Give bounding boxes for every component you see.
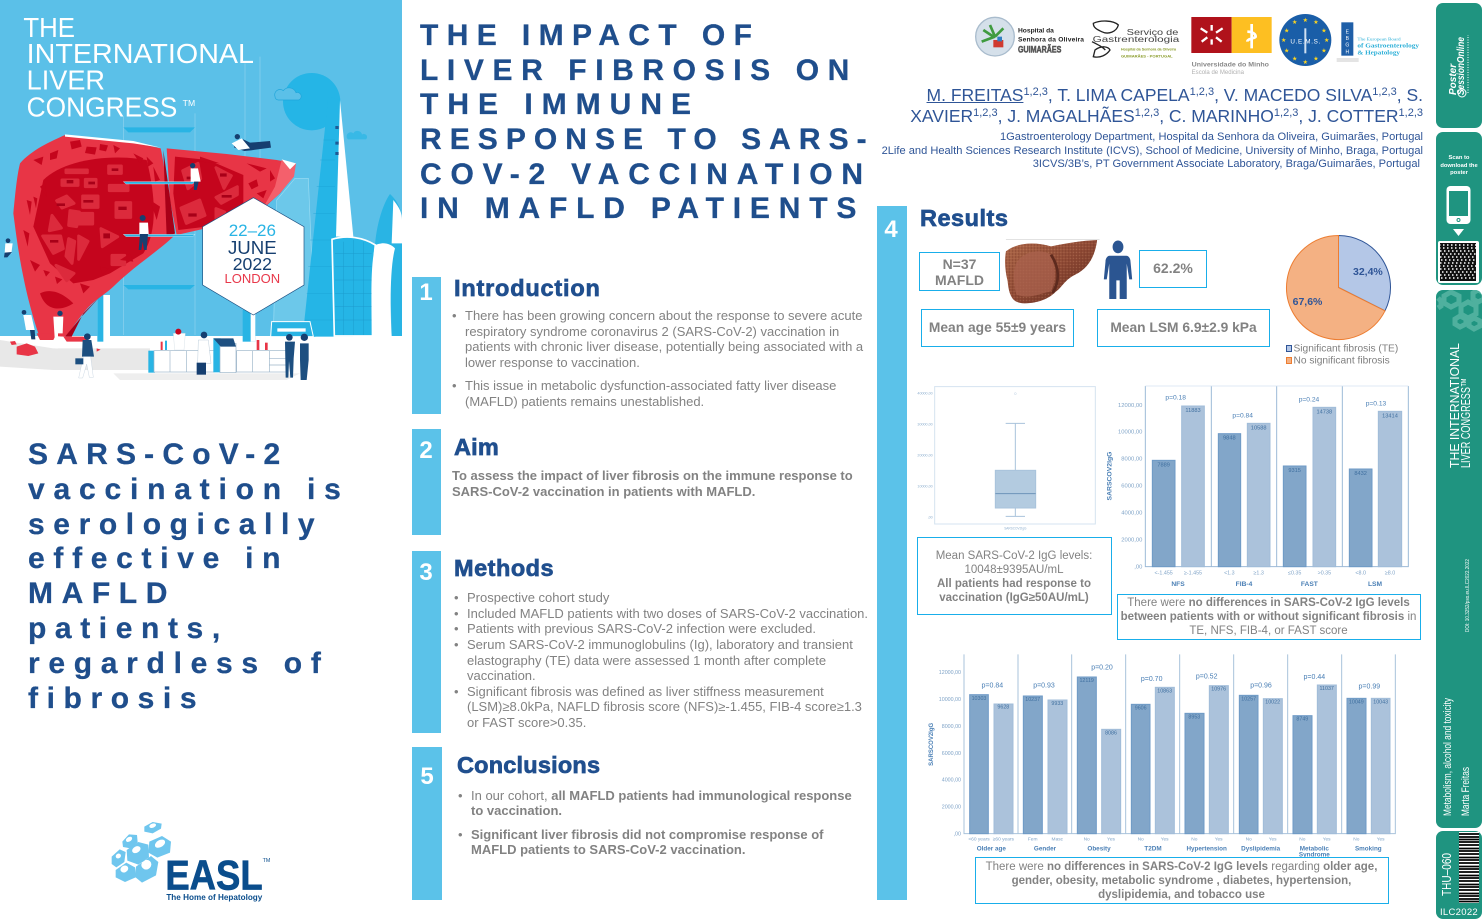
- bar chart: IgG by clinical factor: 8953: [1188, 714, 1200, 720]
- bar chart: IgG by fibrosis score: 13414: [1382, 414, 1398, 420]
- stat box: N=37 MAFLD: N=37: [943, 256, 976, 272]
- callout: mean IgG levels: 10048±9395AU/mL: [964, 564, 1064, 576]
- methods bullets: or FAST score>0.35.: [467, 715, 586, 730]
- logo: european board of gastroenterology and hepatology: H: [1346, 49, 1350, 55]
- bar chart: IgG by fibrosis score: p=0.84: [1232, 413, 1253, 420]
- methods bullets: •: [454, 606, 459, 621]
- affiliations: 2Life and Health Sciences Research Institute (ICVS), School of Medicine, University of Minho, Braga, Portugal: [882, 145, 1423, 157]
- icon: hexagon motif: [1436, 290, 1482, 332]
- aim text: To assess the impact of liver fibrosis on the immune response to: [452, 468, 853, 483]
- side strip: poster session online: Poster: [1448, 63, 1459, 95]
- bar chart: IgG by clinical factor: SARSCOV2IgG: [929, 723, 935, 766]
- scientists: [4, 134, 309, 380]
- affiliations: 3ICVS/3B’s, PT Government Associate Laboratory, Braga/Guimarães, Portugal: [1033, 158, 1420, 170]
- pie chart: significant fibrosis: [1286, 235, 1398, 366]
- hexagon date badge: [203, 198, 304, 315]
- bar chart: IgG by clinical factor: ,00: [954, 831, 961, 837]
- bar chart: IgG by clinical factor: Older age: [977, 846, 1006, 853]
- logo: uems: ★: [1313, 19, 1319, 26]
- introduction bullets: lower response to vaccination.: [465, 355, 640, 370]
- box plot: SARS-CoV-2 IgG: 10000,00: [917, 484, 933, 488]
- pie legend: Significant fibrosis (TE): [1293, 344, 1398, 354]
- bar chart: IgG by clinical factor: 8000,00: [942, 724, 961, 730]
- pie legend: [1286, 344, 1398, 366]
- bar chart: IgG by clinical factor: No: [1246, 837, 1252, 843]
- heading: introduction: Introduction: [454, 275, 601, 301]
- logo: universidade do minho: Universidade do Minho: [1192, 61, 1269, 68]
- bar chart: IgG by clinical factor: 12119: [1079, 678, 1094, 684]
- box plot: SARS-CoV-2 IgG: [917, 386, 1096, 531]
- left takeaway message: SARS-CoV-2: [28, 438, 288, 471]
- methods bullets: •: [454, 621, 459, 636]
- bar chart: IgG by clinical factor: 11037: [1319, 686, 1334, 692]
- number tab 3: [412, 551, 441, 733]
- bar chart: IgG by clinical factor: 2000,00: [942, 804, 961, 810]
- authors: XAVIER1,2,3, J. MAGALHÃES1,2,3, C. MARINHO1,2,3, J. COTTER1,2,3: [910, 106, 1423, 126]
- heading: methods: Methods: [454, 555, 554, 581]
- bar chart: IgG by clinical factor: p=0.99: [1359, 684, 1380, 691]
- methods bullets: Significant fibrosis was defined as liver stiffness measurement: [467, 684, 824, 699]
- icon: liver image: [1005, 239, 1100, 304]
- methods bullets: Prospective cohort study: [467, 590, 609, 605]
- logo: uems: ★: [1284, 48, 1289, 55]
- bar chart: IgG by fibrosis score: 9315: [1288, 468, 1301, 474]
- authors: [910, 85, 1423, 126]
- methods bullets: Included MAFLD patients with two doses of SARS-CoV-2 vaccination.: [467, 606, 868, 621]
- bar chart: IgG by clinical factor: T2DM: [1144, 846, 1162, 853]
- conclusions bullets: to vaccination.: [471, 803, 562, 818]
- logo: uems: ★: [1321, 27, 1327, 34]
- bar chart: IgG by fibrosis score: <-1.455: [1155, 571, 1173, 577]
- bar chart: IgG by clinical factor: 8749: [1296, 717, 1308, 723]
- bar chart: IgG by clinical factor: No: [1353, 837, 1360, 843]
- bar chart: IgG by clinical factor: p=0.44: [1304, 674, 1325, 681]
- bar chart: IgG by clinical factor: Gender: [1034, 846, 1057, 853]
- introduction bullets: patients with chronic liver disease, potentially being associated with a: [465, 339, 863, 354]
- callout: no differences by fibrosis: There were no differences in SARS-CoV-2 IgG levels: [1127, 597, 1410, 609]
- EASL logo: The Home of Hepatology: [166, 892, 262, 902]
- bar chart: IgG by clinical factor: Obesity: [1087, 846, 1111, 853]
- hexagon date badge: 22–26: [229, 221, 276, 240]
- bar chart: IgG by fibrosis score: 11883: [1185, 408, 1201, 414]
- logo: european board of gastroenterology and hepatology: B: [1346, 36, 1350, 42]
- affiliations: 1Gastroenterology Department, Hospital da Senhora da Oliveira, Guimarães, Portugal: [1000, 131, 1423, 143]
- bar chart: IgG by fibrosis score: FAST: [1301, 581, 1318, 588]
- bar chart: IgG by clinical factor: Yes: [1269, 837, 1277, 843]
- scan caption: download the: [1440, 162, 1478, 168]
- number tab 3: 3: [419, 559, 433, 586]
- congress wordmark: THE: [23, 12, 75, 43]
- introduction bullets: respiratory syndrome coronavirus 2 (SARS-CoV-2) vaccination in: [465, 324, 839, 339]
- poster title: [420, 19, 875, 225]
- EASL logo: TM: [263, 858, 270, 864]
- bar chart: IgG by fibrosis score: ≥-1.455: [1184, 571, 1202, 577]
- poster title: IN MAFLD PATIENTS: [420, 192, 865, 225]
- bar chart: IgG by clinical factor: Yes: [1323, 837, 1331, 843]
- bar chart: IgG by clinical factor: 10863: [1157, 688, 1172, 694]
- bar chart: IgG by clinical factor: <60 years: [968, 837, 990, 843]
- aim text: [452, 468, 853, 499]
- doi: DOI: 10.3252/pso.eu.ILC2022.2022: [1465, 559, 1471, 632]
- methods bullets: elastography (TE) data were assessed 1 month after complete: [467, 653, 826, 668]
- congress name: THE INTERNATIONAL: [1447, 343, 1462, 468]
- left takeaway message: fibrosis: [28, 682, 205, 715]
- logo: uems: ★: [1324, 37, 1329, 44]
- conclusions bullets: •: [458, 827, 463, 842]
- bar chart: IgG by clinical factor: p=0.52: [1196, 673, 1218, 680]
- bar chart: IgG by clinical factor: 10976: [1211, 687, 1226, 693]
- bar chart: IgG by clinical factor: 9628: [997, 705, 1009, 711]
- box plot: SARS-CoV-2 IgG: 20000,00: [917, 454, 933, 458]
- logo: european board of gastroenterology and hepatology: [1337, 22, 1420, 62]
- bar chart: IgG by clinical factor: Fem: [1028, 837, 1038, 843]
- left takeaway message: serologically: [28, 508, 323, 541]
- bar chart: IgG by clinical factor: 12000,00: [939, 670, 961, 676]
- bar chart: IgG by fibrosis score: 4000,00: [1121, 511, 1143, 517]
- section 4: results tab: [877, 206, 907, 900]
- bar chart: IgG by clinical factor: Dyslipidemia: [1241, 846, 1281, 853]
- hexagon date badge: LONDON: [225, 271, 280, 286]
- EASL logo: EASL: [165, 852, 263, 898]
- left takeaway message: vaccination is: [28, 473, 350, 506]
- bar chart: IgG by clinical factor: 10237: [1025, 697, 1040, 703]
- liver shape: [10, 134, 296, 356]
- bar chart: IgG by fibrosis score: <8.0: [1355, 571, 1366, 577]
- box plot: SARS-CoV-2 IgG: 30000,00: [917, 423, 933, 427]
- congress wordmark: TM: [183, 98, 195, 108]
- bar chart: IgG by clinical factor: 9933: [1051, 701, 1063, 707]
- bar chart: IgG by clinical factor: 10000,00: [939, 697, 961, 703]
- stat box: mean age: [921, 309, 1074, 347]
- logo: hospital da senhora da oliveira: GUIMARÃES: [1018, 45, 1061, 55]
- bar chart: IgG by fibrosis score: >0.35: [1318, 571, 1331, 577]
- side strip: poster number and barcode: [1436, 831, 1482, 919]
- poster title: COV-2 VACCINATION: [420, 158, 872, 191]
- bar chart: IgG by clinical factor: 8086: [1105, 730, 1117, 736]
- callout: no differences by fibrosis: between patients with or without significant fibrosis in: [1121, 611, 1416, 623]
- congress name: LIVER CONGRESS™: [1458, 378, 1473, 468]
- logo: uems: ★: [1292, 56, 1297, 63]
- hexagon date badge: 2022: [233, 254, 272, 274]
- bar chart: IgG by clinical factor: p=0.20: [1091, 665, 1113, 672]
- callout: no differences by fibrosis: [1117, 594, 1421, 640]
- bar chart: IgG by clinical factor: Smoking: [1355, 846, 1382, 853]
- bar chart: IgG by fibrosis score: 6000,00: [1121, 484, 1143, 490]
- logo: universidade do minho: Escola de Medicina: [1192, 70, 1245, 76]
- bar chart: IgG by clinical factor: 4000,00: [942, 778, 961, 784]
- logo: uems: ★: [1321, 48, 1327, 55]
- logo: hospital da senhora da oliveira: [976, 17, 1084, 56]
- logo: servico de gastrenterologia: Gastrenterologia: [1093, 35, 1180, 44]
- bar chart: IgG by clinical factor: No: [1191, 837, 1198, 843]
- callout: no differences by clinical factor: There were no differences in SARS-CoV-2 IgG levels regarding older age,: [986, 861, 1377, 873]
- introduction bullets: (MAFLD) patients remains unestablished.: [465, 394, 704, 409]
- icon: phone and QR code: [1438, 186, 1479, 283]
- bar chart: IgG by clinical factor: Yes: [1107, 837, 1116, 843]
- bar chart: IgG by clinical factor: Metabolic: [1300, 846, 1329, 853]
- bar chart: IgG by clinical factor: 6000,00: [942, 751, 961, 757]
- number tab 5: 5: [420, 763, 434, 790]
- bar chart: IgG by fibrosis score: p=0.18: [1165, 395, 1186, 402]
- section 2: aim: [412, 429, 853, 535]
- bar chart: IgG by fibrosis score: FIB-4: [1236, 581, 1253, 588]
- topic and author: Metabolism, alcohol and toxicity: [1442, 698, 1454, 816]
- number tab 1: [412, 277, 441, 414]
- section 1: introduction: [412, 275, 864, 414]
- congress name: Marta Freitas: [1460, 767, 1472, 816]
- number tab 2: [412, 429, 441, 535]
- bar chart: IgG by clinical factor: 10043: [1373, 699, 1388, 705]
- logo: uems: ★: [1303, 17, 1308, 24]
- callout: no differences by clinical factor: [975, 857, 1389, 904]
- side strip: poster number and barcode: THU–060: [1439, 853, 1454, 896]
- heading: results: Results: [920, 205, 1008, 231]
- bar chart: IgG by clinical factor: Yes: [1161, 837, 1169, 843]
- bar chart: IgG by clinical factor: No: [1084, 837, 1090, 843]
- callout: mean IgG levels: All patients had response to: [937, 578, 1091, 590]
- callout: mean IgG levels: [917, 537, 1112, 615]
- conclusions bullets: MAFLD patients to SARS-CoV-2 vaccination.: [471, 842, 745, 857]
- logo: uems: ★: [1281, 37, 1286, 44]
- section 4: results tab: 4: [884, 216, 898, 243]
- EASL logo: [112, 822, 270, 902]
- bar chart: IgG by fibrosis score: LSM: [1368, 581, 1382, 588]
- box plot: SARS-CoV-2 IgG: 40000,00: [917, 392, 933, 396]
- logo: uems: U.E.M.S.: [1290, 38, 1321, 45]
- conclusions bullets: [458, 788, 852, 857]
- scan caption: poster: [1450, 170, 1468, 176]
- bar chart: IgG by fibrosis score: 14738: [1316, 410, 1332, 416]
- section 3: methods: [412, 551, 868, 733]
- methods bullets: •: [454, 637, 459, 652]
- bar chart: IgG by clinical factor: 10049: [1349, 699, 1364, 705]
- pie chart: significant fibrosis: 67,6%: [1292, 296, 1323, 308]
- bar chart: IgG by clinical factor: 10303: [972, 696, 986, 702]
- bar chart: IgG by fibrosis score: 12000,00: [1118, 403, 1143, 409]
- bar chart: IgG by fibrosis score: 10588: [1251, 426, 1267, 432]
- bar chart: IgG by fibrosis score: <1.3: [1224, 571, 1235, 577]
- logo: uems: ★: [1313, 56, 1319, 63]
- callout: no differences by clinical factor: dyslipidemia, and tobacco use: [1098, 889, 1265, 901]
- logo: hospital da senhora da oliveira: Senhora da Oliveira: [1018, 36, 1084, 43]
- methods bullets: vaccination.: [467, 668, 536, 683]
- introduction bullets: •: [452, 378, 457, 393]
- congress wordmark: LIVER: [27, 65, 105, 96]
- bar chart: IgG by fibrosis score: 8432: [1354, 471, 1367, 477]
- aim text: SARS-CoV-2 vaccination in patients with MAFLD.: [452, 484, 755, 499]
- pie legend: No significant fibrosis: [1293, 356, 1389, 366]
- logo: uems: ★: [1284, 27, 1289, 34]
- stat box: mean LSM: [1097, 309, 1270, 347]
- bar chart: IgG by fibrosis score: 2000,00: [1121, 538, 1143, 544]
- introduction bullets: There has been growing concern about the response to severe acute: [465, 308, 862, 323]
- left takeaway message: [28, 438, 350, 715]
- bar chart: IgG by clinical factor: Hypertension: [1186, 846, 1227, 853]
- congress wordmark: CONGRESS: [27, 91, 177, 122]
- stat box: mean LSM: Mean LSM 6.9±2.9 kPa: [1110, 320, 1257, 335]
- icon: person: [1104, 240, 1132, 299]
- logo: universidade do minho: [1191, 17, 1272, 76]
- poster title: RESPONSE TO SARS-: [420, 123, 875, 156]
- logo: european board of gastroenterology and hepatology: of Gastroenterology: [1357, 42, 1420, 49]
- bar chart: IgG by fibrosis score: 7889: [1157, 462, 1170, 468]
- methods bullets: Serum SARS-CoV-2 immunoglobulins (Ig), laboratory and transient: [467, 637, 853, 652]
- section 5: conclusions: [412, 747, 852, 900]
- hexagon date badge: JUNE: [228, 237, 277, 258]
- bar chart: IgG by clinical factor: Masc: [1052, 837, 1064, 843]
- lab bench: [148, 338, 287, 373]
- bar chart: IgG by clinical factor: Syndrome: [1299, 851, 1330, 858]
- number tab 1: 1: [419, 279, 433, 306]
- stat box: mean age: Mean age 55±9 years: [929, 320, 1066, 335]
- number tab 2: 2: [419, 437, 433, 464]
- bar chart: IgG by fibrosis score: SARSCOV2IgG: [1106, 452, 1113, 500]
- conclusions bullets: •: [458, 788, 463, 803]
- box plot: SARS-CoV-2 IgG: ,00: [928, 515, 933, 519]
- callout: mean IgG levels: vaccination (IgG≥50AU/mL): [939, 592, 1089, 604]
- bar chart: IgG by fibrosis score: p=0.13: [1366, 400, 1387, 407]
- introduction bullets: •: [452, 308, 457, 323]
- logo: european board of gastroenterology and hepatology: G: [1345, 43, 1349, 49]
- left takeaway message: regardless of: [28, 647, 330, 680]
- methods bullets: (LSM)≥8.0kPa, NAFLD fibrosis score (NFS)≥-1.455, FIB-4 score≥1.3: [467, 699, 862, 714]
- heading: aim: Aim: [454, 434, 499, 460]
- stat box: N=37 MAFLD: [919, 252, 1000, 291]
- bar chart: IgG by clinical factor: Yes: [1215, 837, 1223, 843]
- logo: uems: ★: [1292, 19, 1297, 26]
- poster title: LIVER FIBROSIS ON: [420, 54, 858, 87]
- bar chart: IgG by clinical factor: No: [1299, 837, 1306, 843]
- stat box: 62.2%: 62.2%: [1153, 260, 1193, 276]
- poster title: THE IMMUNE: [420, 88, 700, 121]
- bar chart: IgG by clinical factor: 9606: [1135, 705, 1147, 711]
- logo: european board of gastroenterology and hepatology: E: [1346, 29, 1350, 35]
- logo: servico de gastrenterologia: [1092, 21, 1180, 59]
- left takeaway message: effective in: [28, 542, 289, 575]
- logo: hospital da senhora da oliveira: Hospital da: [1018, 28, 1054, 35]
- heading: conclusions: Conclusions: [457, 752, 600, 778]
- methods bullets: •: [454, 590, 459, 605]
- number tab 5: [412, 747, 442, 900]
- side strip: poster session online: SessionOnline: [1456, 37, 1467, 95]
- logo: servico de gastrenterologia: Hospital da Senhora da Oliveira: [1121, 47, 1177, 52]
- logo: european board of gastroenterology and hepatology: & Hepatology: [1357, 50, 1401, 57]
- bar chart: IgG by fibrosis score: [1106, 386, 1409, 588]
- bar chart: IgG by clinical factor: [928, 654, 1396, 858]
- callout: no differences by clinical factor: gender, obesity, metabolic syndrome , diabetes, hypertension,: [1012, 875, 1351, 887]
- side strip: poster number and barcode: ILC2022: [1440, 907, 1478, 918]
- affiliations: [882, 131, 1423, 170]
- logo: servico de gastrenterologia: Serviço de: [1127, 28, 1179, 37]
- bar chart: IgG by fibrosis score: p=0.24: [1299, 396, 1320, 403]
- congress wordmark: [23, 12, 254, 122]
- conclusions bullets: In our cohort, all MAFLD patients had immunological response: [471, 788, 852, 803]
- methods bullets: •: [454, 684, 459, 699]
- poster title: THE IMPACT OF: [420, 19, 760, 52]
- introduction bullets: This issue in metabolic dysfunction-associated fatty liver disease: [465, 378, 836, 393]
- bar chart: IgG by clinical factor: Yes: [1377, 837, 1385, 843]
- stat box: N=37 MAFLD: MAFLD: [935, 272, 984, 288]
- bar chart: IgG by fibrosis score: ,00: [1134, 565, 1143, 571]
- logo: servico de gastrenterologia: GUIMARÃES - PORTUGAL: [1121, 54, 1173, 59]
- bar chart: IgG by clinical factor: No: [1138, 837, 1144, 843]
- bar chart: IgG by clinical factor: 10257: [1241, 696, 1256, 702]
- congress banner illustration: [0, 0, 402, 380]
- side strip: scan to download: [1436, 132, 1482, 285]
- bar chart: IgG by clinical factor: p=0.93: [1033, 683, 1055, 690]
- congress wordmark: INTERNATIONAL: [27, 38, 254, 69]
- bar chart: IgG by fibrosis score: NFS: [1171, 581, 1185, 588]
- bar chart: IgG by clinical factor: 10022: [1265, 700, 1280, 706]
- left takeaway message: MAFLD: [28, 577, 176, 610]
- logo: uems: [1279, 14, 1331, 66]
- pie chart: significant fibrosis: 32,4%: [1352, 266, 1383, 278]
- scan caption: Scan to: [1449, 155, 1469, 161]
- scan caption: [1440, 155, 1478, 176]
- bar chart: IgG by clinical factor: p=0.96: [1250, 683, 1272, 690]
- side strip: session details: [1436, 290, 1482, 828]
- bus: [271, 322, 313, 337]
- stat box: 62.2%: [1139, 250, 1207, 288]
- introduction bullets: [452, 308, 864, 409]
- congress name: [1442, 343, 1473, 816]
- box plot: SARS-CoV-2 IgG: SARSCOV2IgG: [1004, 527, 1027, 531]
- bar chart: IgG by fibrosis score: 10000,00: [1118, 430, 1143, 436]
- bar chart: IgG by clinical factor: ≥60 years: [993, 837, 1015, 843]
- bar chart: IgG by fibrosis score: ≥8.0: [1385, 571, 1395, 577]
- methods bullets: [454, 590, 868, 730]
- bar chart: IgG by fibrosis score: 9848: [1223, 436, 1236, 442]
- methods bullets: Patients with previous SARS-CoV-2 infection were excluded.: [467, 621, 816, 636]
- left takeaway message: patients,: [28, 612, 229, 645]
- bar chart: IgG by clinical factor: p=0.70: [1141, 676, 1163, 683]
- side strip: poster session online: [1436, 3, 1482, 128]
- bar chart: IgG by clinical factor: p=0.84: [982, 683, 1003, 690]
- callout: no differences by fibrosis: TE, NFS, FIB-4, or FAST score: [1189, 625, 1348, 637]
- bar chart: IgG by fibrosis score: ≥1.3: [1253, 571, 1264, 577]
- callout: mean IgG levels: Mean SARS-CoV-2 IgG levels:: [936, 550, 1092, 562]
- logo: uems: ★: [1303, 59, 1308, 66]
- institution logos: [975, 14, 1420, 76]
- bar chart: IgG by fibrosis score: ≤0.35: [1288, 571, 1301, 577]
- authors: M. FREITAS1,2,3, T. LIMA CAPELA1,2,3, V. MACEDO SILVA1,2,3, S.: [927, 85, 1423, 105]
- bar chart: IgG by fibrosis score: 8000,00: [1121, 457, 1143, 463]
- conclusions bullets: Significant liver fibrosis did not compromise response of: [471, 827, 824, 842]
- logo: european board of gastroenterology and hepatology: The European Board: [1357, 36, 1402, 41]
